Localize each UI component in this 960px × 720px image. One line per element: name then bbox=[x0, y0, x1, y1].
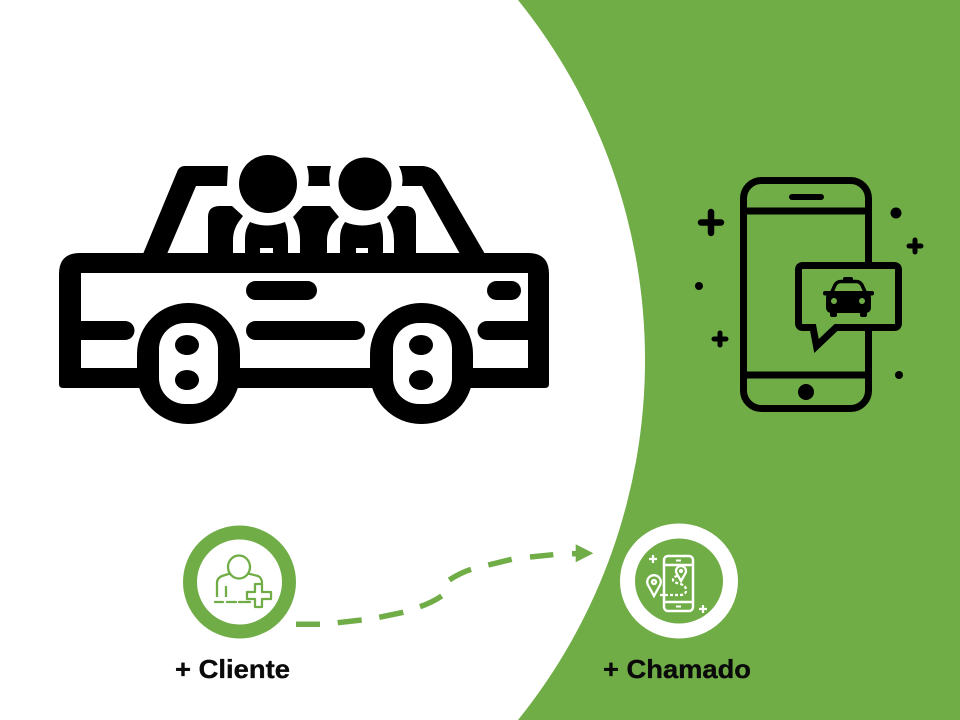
passenger torsos bbox=[245, 222, 383, 254]
dotted route bbox=[660, 576, 686, 595]
passenger heads bbox=[239, 155, 392, 213]
dashed arrow from client to call bbox=[296, 544, 593, 624]
phone outline bbox=[744, 180, 868, 408]
speech bubble bbox=[798, 266, 898, 346]
left windshield pillar bbox=[143, 166, 228, 254]
phone glyph bbox=[664, 556, 693, 611]
centre roof segment bbox=[307, 166, 331, 186]
taxi icon bbox=[823, 277, 874, 317]
badge ring bbox=[190, 532, 289, 632]
sparkle plus signs bbox=[701, 212, 921, 345]
rear wheel bbox=[370, 303, 473, 424]
right rear pillar bbox=[399, 166, 485, 254]
door handles and trim bars bbox=[81, 281, 528, 340]
badge ring bbox=[628, 531, 730, 631]
car body bbox=[59, 253, 549, 388]
plus glyph bbox=[247, 584, 271, 607]
sparkle dots bbox=[695, 208, 903, 379]
seats bbox=[208, 206, 416, 254]
icon: new client badge bbox=[190, 532, 289, 632]
label: + Chamado: + Chamado bbox=[603, 654, 751, 684]
label: + Cliente: + Cliente bbox=[175, 654, 290, 684]
phone speaker bbox=[789, 194, 824, 200]
icon: service call badge bbox=[628, 531, 730, 631]
icon: smartphone with taxi message bbox=[695, 180, 921, 408]
phone home button bbox=[798, 384, 814, 400]
front wheel bbox=[137, 303, 240, 424]
sparkle plus signs bbox=[649, 555, 707, 613]
green curved background panel bbox=[518, 0, 960, 720]
person glyph bbox=[215, 556, 262, 602]
icon: car with two passengers bbox=[59, 155, 549, 424]
location pins bbox=[647, 566, 686, 596]
